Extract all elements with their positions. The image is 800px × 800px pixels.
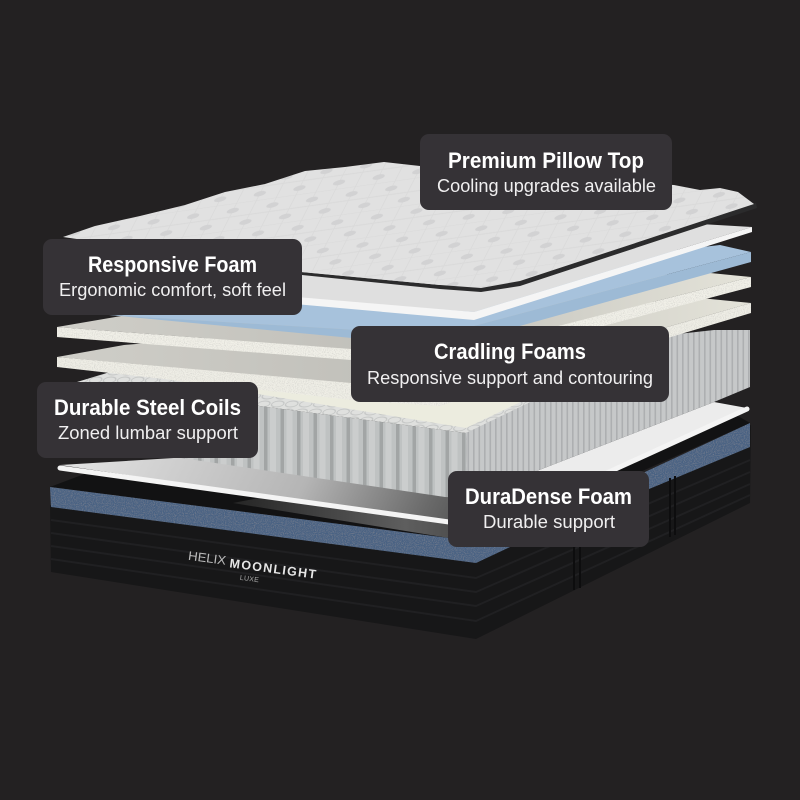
brand logo: LUXE (239, 575, 259, 584)
blue edge (109, 252, 751, 348)
label: Cradling Foams (351, 326, 669, 402)
coil side ribs (466, 330, 750, 498)
base blue band (50, 423, 750, 563)
foam edge (57, 277, 751, 369)
label: Durable Steel Coils (37, 382, 258, 458)
steel coils layer (77, 330, 750, 498)
foam top surface (60, 440, 500, 527)
label: Responsive Foam: Ergonomic comfort, soft feel (59, 280, 286, 300)
base straps (574, 476, 675, 590)
brand logo: HELIX (187, 549, 228, 568)
blue gel foam layer (109, 245, 751, 348)
label: DuraDense Foam (448, 471, 649, 547)
lower cradling foam (57, 298, 751, 406)
label: Premium Pillow Top (420, 134, 672, 210)
label: DuraDense Foam: Durable support (483, 512, 615, 532)
base stripes (51, 460, 750, 621)
label: Durable Steel Coils: Durable Steel Coils (54, 395, 241, 420)
white surface (120, 223, 752, 312)
foam surface (57, 272, 751, 356)
label: Cradling Foams: Responsive support and contouring (367, 368, 653, 388)
brand logo: MOONLIGHT (229, 556, 317, 582)
blue surface (109, 245, 751, 335)
pillow surface (63, 162, 754, 288)
label: Responsive Foam: Responsive Foam (88, 252, 257, 277)
label: Cradling Foams: Cradling Foams (434, 339, 586, 364)
base black casing (50, 425, 751, 639)
responsive foam layer (120, 223, 752, 320)
white edge (250, 227, 752, 320)
premium pillow top (63, 162, 757, 292)
base inner cavity (50, 402, 750, 538)
base inner sheen (233, 490, 520, 538)
coil top (77, 335, 669, 433)
label: Premium Pillow Top: Premium Pillow Top (448, 148, 644, 173)
label: DuraDense Foam: DuraDense Foam (465, 484, 632, 509)
label: Durable Steel Coils: Zoned lumbar support (58, 423, 238, 443)
label: Premium Pillow Top: Cooling upgrades available (437, 176, 656, 196)
cream cover (160, 345, 640, 428)
foam white edges (60, 409, 747, 528)
foam edge (57, 303, 751, 406)
coil front ribs (77, 382, 467, 498)
brand logo (186, 549, 317, 592)
DuraDense foam layer (60, 402, 747, 528)
foam surface (57, 298, 751, 392)
upper cradling foam (57, 272, 751, 369)
mattress base layer (50, 402, 751, 639)
foam right surface (467, 402, 747, 527)
pillow dark edge (290, 203, 757, 292)
label: Responsive Foam (43, 239, 302, 315)
